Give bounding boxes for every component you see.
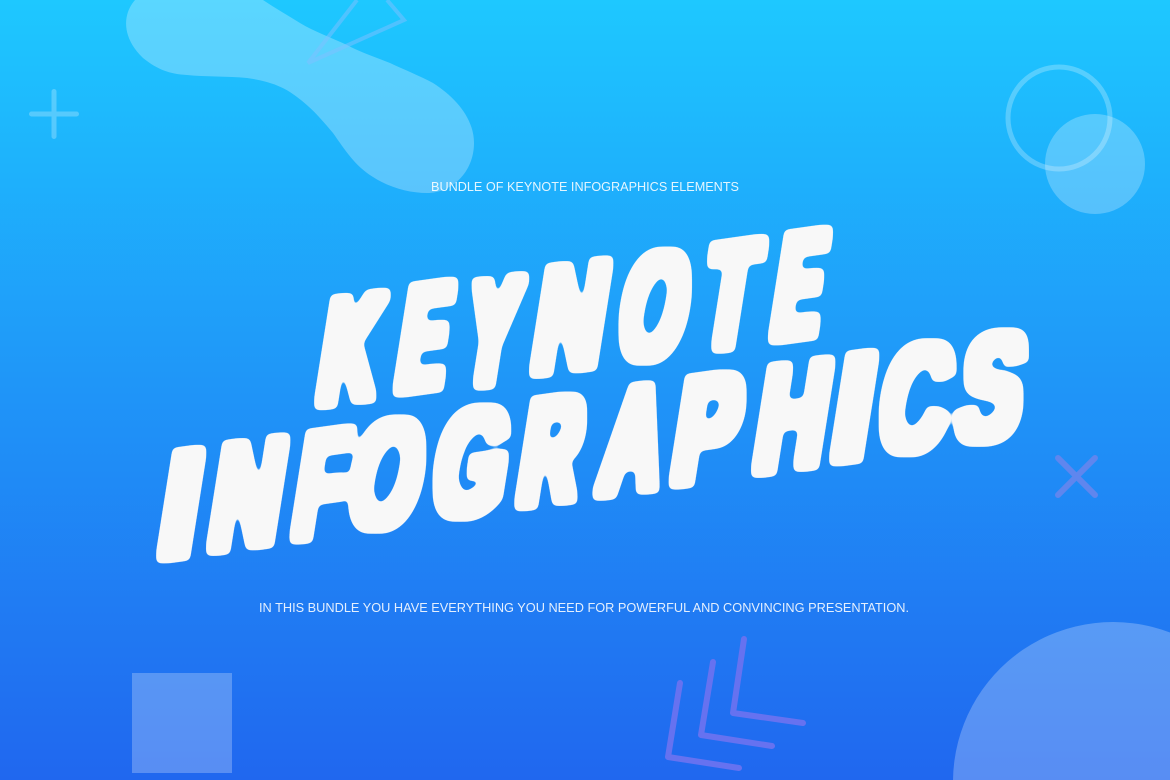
chevrons: [668, 639, 803, 768]
plus icon: [32, 92, 76, 136]
square: [132, 673, 232, 773]
title line 2: INFOGRAPHICS: C: [869, 309, 964, 487]
title line 1: KEYNOTE: [310, 199, 836, 437]
title line 2: INFOGRAPHICS: F: [285, 396, 359, 572]
cross icon: [1058, 458, 1095, 495]
subtitle bottom: IN THIS BUNDLE YOU HAVE EVERYTHING YOU NEED FOR POWERFUL AND CONVINCING PRESENTATION.: [259, 600, 909, 615]
title line 2: INFOGRAPHICS: R: [510, 361, 595, 538]
title line 2: INFOGRAPHICS: A: [591, 352, 677, 528]
triangle outline: [308, 0, 404, 63]
title line 2: INFOGRAPHICS: I: [147, 418, 215, 591]
subtitle top: BUNDLE OF KEYNOTE INFOGRAPHICS ELEMENTS: [431, 179, 739, 194]
title line 2: INFOGRAPHICS: P: [663, 340, 753, 518]
title line 1: KEYNOTE: K: [310, 261, 393, 437]
title line 1: KEYNOTE: Y: [455, 246, 529, 420]
title line 2: INFOGRAPHICS: O: [338, 385, 436, 563]
title line 2: INFOGRAPHICS: G: [423, 372, 522, 551]
title line 2: INFOGRAPHICS: N: [200, 405, 296, 584]
title line 1: KEYNOTE: E: [389, 250, 462, 425]
title line 1: KEYNOTE: O: [609, 218, 701, 396]
title line 2: INFOGRAPHICS: I: [820, 321, 888, 494]
large circle: [953, 622, 1170, 780]
decorative blob: [126, 0, 474, 193]
title line 1: KEYNOTE: E: [764, 199, 836, 373]
title line 2: INFOGRAPHICS: S: [947, 299, 1037, 477]
title line 2: INFOGRAPHICS: [147, 299, 1037, 591]
title line 1: KEYNOTE: N: [523, 228, 619, 407]
title: keynote infographics: [147, 199, 1037, 591]
title line 1: KEYNOTE: T: [693, 207, 769, 382]
filled circle: [1045, 114, 1145, 214]
ring: [1008, 67, 1110, 169]
title line 2: INFOGRAPHICS: H: [745, 327, 841, 506]
